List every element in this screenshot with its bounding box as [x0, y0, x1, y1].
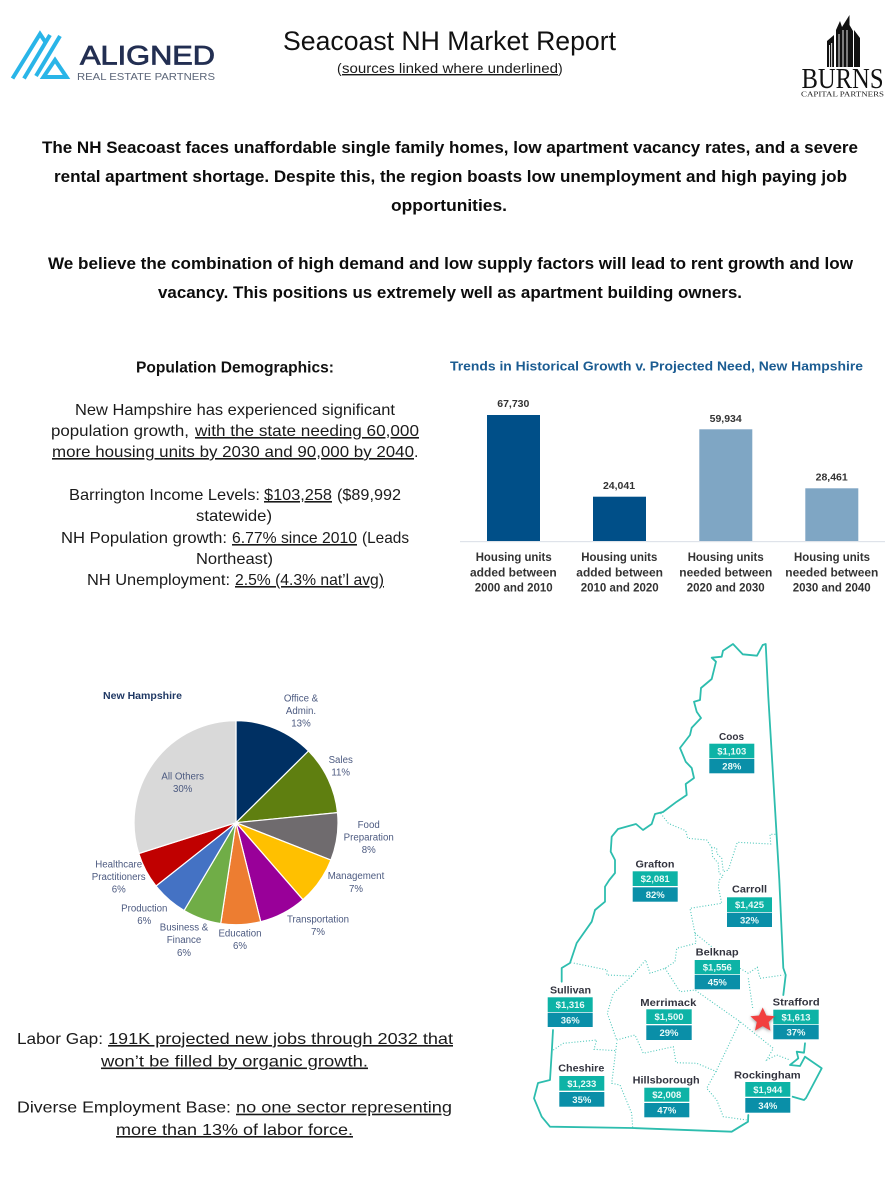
logo: Aligned Real Estate Partners: REAL ESTATE PARTNERS	[77, 71, 215, 83]
bar: 2000 to 2010	[470, 398, 557, 595]
county: Carroll: $1,425	[735, 900, 765, 911]
bar: 2000 to 2010: 67,730	[497, 398, 530, 410]
key statistics text: NH Population growth:	[61, 530, 227, 547]
intro statement	[42, 139, 858, 302]
intro statement: The NH Seacoast faces unaffordable single family homes, low apartment vacancy rates, and a severe	[42, 139, 858, 157]
pie labels: 7%	[311, 927, 325, 938]
pie labels: 30%	[173, 784, 193, 795]
housing need text: New Hampshire has experienced significant	[75, 402, 396, 419]
key statistics text: statewide)	[196, 508, 272, 525]
intro statement: opportunities.	[391, 197, 507, 215]
county: Sullivan	[548, 984, 593, 1027]
chart title: Trends in Historical Growth v. Projected Need, New Hampshire	[450, 358, 863, 374]
diverse employment base: no one sector representing	[236, 1100, 452, 1117]
county: Grafton: 82%	[646, 890, 665, 901]
key statistics text: Barrington Income Levels:	[69, 487, 260, 504]
bar: 2010 to 2020: 24,041	[603, 480, 635, 492]
housing need text: more housing units by 2030 and 90,000 by 2040	[52, 444, 414, 461]
logo: Aligned Real Estate Partners	[12, 34, 215, 83]
county: Coos	[709, 731, 754, 773]
county: Rockingham: Rockingham	[734, 1070, 801, 1082]
map: New Hampshire counties	[534, 644, 822, 1132]
pie labels: Admin.	[286, 706, 316, 717]
county: Coos: $1,103	[717, 746, 746, 758]
logo: Burns Capital Partners: CAPITAL PARTNERS	[801, 90, 884, 99]
county: Strafford	[773, 996, 820, 1039]
bar: 2010 to 2020: 2010 and 2020	[581, 583, 659, 595]
key statistics text: Northeast)	[196, 551, 273, 568]
county: Strafford: Strafford	[773, 996, 820, 1008]
bar: 2020 to 2030	[679, 413, 772, 595]
state outline	[534, 644, 822, 1132]
labor gap: Labor Gap:	[17, 1031, 103, 1048]
pie slices	[134, 721, 338, 925]
key statistics text: 6.77% since 2010	[232, 530, 357, 547]
county boundaries	[553, 813, 790, 1128]
county: Merrimack	[640, 997, 696, 1040]
bar: 2020 to 2030: 59,934	[710, 413, 742, 425]
county: Merrimack: $1,500	[654, 1012, 684, 1023]
labor gap	[17, 1031, 454, 1070]
pie labels: Production	[121, 904, 167, 915]
bar: 2030 to 2040: Housing units	[794, 552, 870, 564]
bar: 2010 to 2020: Housing units	[581, 552, 657, 564]
county: Cheshire: 35%	[572, 1095, 592, 1106]
icon: red star marking location	[750, 1008, 775, 1031]
heading: Population Demographics:	[136, 360, 334, 376]
pie labels: 6%	[137, 916, 152, 927]
county: Merrimack: 29%	[659, 1028, 679, 1039]
title: Seacoast NH Market Report	[283, 26, 616, 56]
county: Merrimack: Merrimack	[640, 997, 696, 1009]
county: Carroll: Carroll	[732, 883, 767, 895]
county: Rockingham	[734, 1070, 801, 1113]
county: Cheshire: $1,233	[567, 1079, 596, 1090]
county: Cheshire: Cheshire	[558, 1063, 604, 1075]
county: Grafton	[633, 859, 678, 902]
pie labels	[92, 694, 394, 959]
county: Sullivan: Sullivan	[550, 984, 591, 996]
county: Coos: Coos	[719, 731, 744, 743]
bar: 2010 to 2020: added between	[576, 567, 663, 579]
county: Rockingham: 34%	[758, 1101, 778, 1112]
county: Belknap: 45%	[708, 978, 727, 989]
pie labels: 6%	[112, 885, 126, 896]
key statistics text: 2.5% (4.3% nat’l avg)	[235, 572, 384, 589]
bar: 2020 to 2030: 2020 and 2030	[687, 583, 765, 595]
pie labels: Transportation	[287, 915, 349, 926]
bar: 2000 to 2010: added between	[470, 567, 557, 579]
bar: 2000 to 2010: Housing units	[476, 552, 552, 564]
pie labels: 11%	[331, 768, 350, 779]
pie labels: Preparation	[344, 832, 394, 844]
bar: 2020 to 2030: needed between	[679, 567, 772, 579]
bar: 2000 to 2010: 2000 and 2010	[475, 583, 553, 595]
bar chart: historical growth vs projected need	[450, 358, 885, 595]
key statistics text: NH Unemployment:	[87, 572, 230, 589]
county: Cheshire	[558, 1063, 604, 1107]
county: Rockingham: $1,944	[753, 1085, 783, 1096]
key statistics text: (Leads	[362, 530, 409, 547]
county: Hillsborough: 47%	[657, 1106, 677, 1117]
diverse employment base	[17, 1100, 452, 1139]
pie labels: Office &	[284, 694, 319, 705]
county: Sullivan: $1,316	[556, 1000, 585, 1011]
labor gap: 191K projected new jobs through 2032 that	[108, 1031, 454, 1048]
pie labels: Education	[218, 929, 262, 940]
bar: 2030 to 2040: 2030 and 2040	[793, 583, 871, 595]
bar: 2020 to 2030: Housing units	[688, 552, 764, 564]
county: Belknap: Belknap	[696, 946, 739, 958]
housing need text: population growth,	[51, 423, 189, 440]
pie labels: 13%	[291, 719, 311, 730]
pie labels: Food	[358, 820, 380, 831]
pie labels: Sales	[329, 755, 353, 766]
county: Grafton: $2,081	[641, 874, 670, 885]
header	[12, 15, 884, 99]
pie labels: Practitioners	[92, 872, 146, 883]
housing need text	[51, 402, 419, 461]
subtitle: sources linked where underlined	[342, 60, 558, 76]
intro statement: We believe the combination of high demand and low supply factors will lead to rent growth and low	[48, 255, 853, 273]
county: Hillsborough: $2,008	[652, 1090, 681, 1101]
county: Sullivan: 36%	[561, 1015, 580, 1026]
county: Strafford: $1,613	[781, 1012, 811, 1024]
pie labels: Management	[328, 871, 385, 882]
county: Carroll: 32%	[740, 915, 760, 926]
county: Strafford: 37%	[786, 1028, 806, 1039]
logo: Burns Capital Partners: BURNS	[802, 64, 884, 95]
bar: 2010 to 2020	[576, 480, 663, 595]
pie labels: 7%	[349, 884, 363, 895]
pie heading: New Hampshire	[103, 690, 182, 702]
county: Carroll	[727, 883, 772, 927]
labor text	[17, 1031, 454, 1139]
pie labels: Healthcare	[95, 860, 142, 871]
pie labels: Finance	[167, 935, 201, 946]
logo: Aligned Real Estate Partners: ALIGNED	[80, 40, 215, 70]
subtitle: )	[558, 60, 563, 76]
pie labels: Business &	[160, 923, 209, 934]
pie labels: 8%	[362, 845, 376, 856]
diverse employment base: Diverse Employment Base:	[17, 1100, 231, 1117]
bar: 2030 to 2040: needed between	[785, 567, 878, 579]
key statistics text: ($89,992	[337, 487, 401, 504]
pie labels: 6%	[177, 948, 191, 959]
county: Hillsborough	[633, 1074, 700, 1117]
pie labels: All Others	[161, 772, 204, 783]
intro statement: rental apartment shortage. Despite this, the region boasts low unemployment and high paying job	[54, 168, 847, 186]
intro statement: vacancy. This positions us extremely well as apartment building owners.	[158, 284, 742, 302]
key statistics text	[61, 487, 409, 589]
county: Hillsborough: Hillsborough	[633, 1074, 700, 1086]
pie labels: 6%	[233, 941, 247, 952]
panel: population demographics	[51, 360, 419, 589]
county: Belknap: $1,556	[703, 963, 732, 974]
bar: 2030 to 2040	[785, 472, 878, 595]
labor gap: won’t be filled by organic growth.	[100, 1054, 368, 1070]
housing need text: .	[414, 444, 418, 461]
key statistics text: $103,258	[264, 487, 332, 504]
pie chart: New Hampshire employment by sector	[92, 690, 394, 959]
county: Grafton: Grafton	[636, 859, 674, 871]
housing need text: with the state needing 60,000	[194, 423, 419, 440]
diverse employment base: more than 13% of labor force.	[116, 1122, 353, 1139]
bar: 2030 to 2040: 28,461	[816, 472, 848, 484]
county: Belknap	[695, 946, 740, 989]
subtitle: (	[337, 60, 342, 76]
logo: Burns Capital Partners	[801, 15, 884, 99]
county: Coos: 28%	[722, 762, 742, 773]
